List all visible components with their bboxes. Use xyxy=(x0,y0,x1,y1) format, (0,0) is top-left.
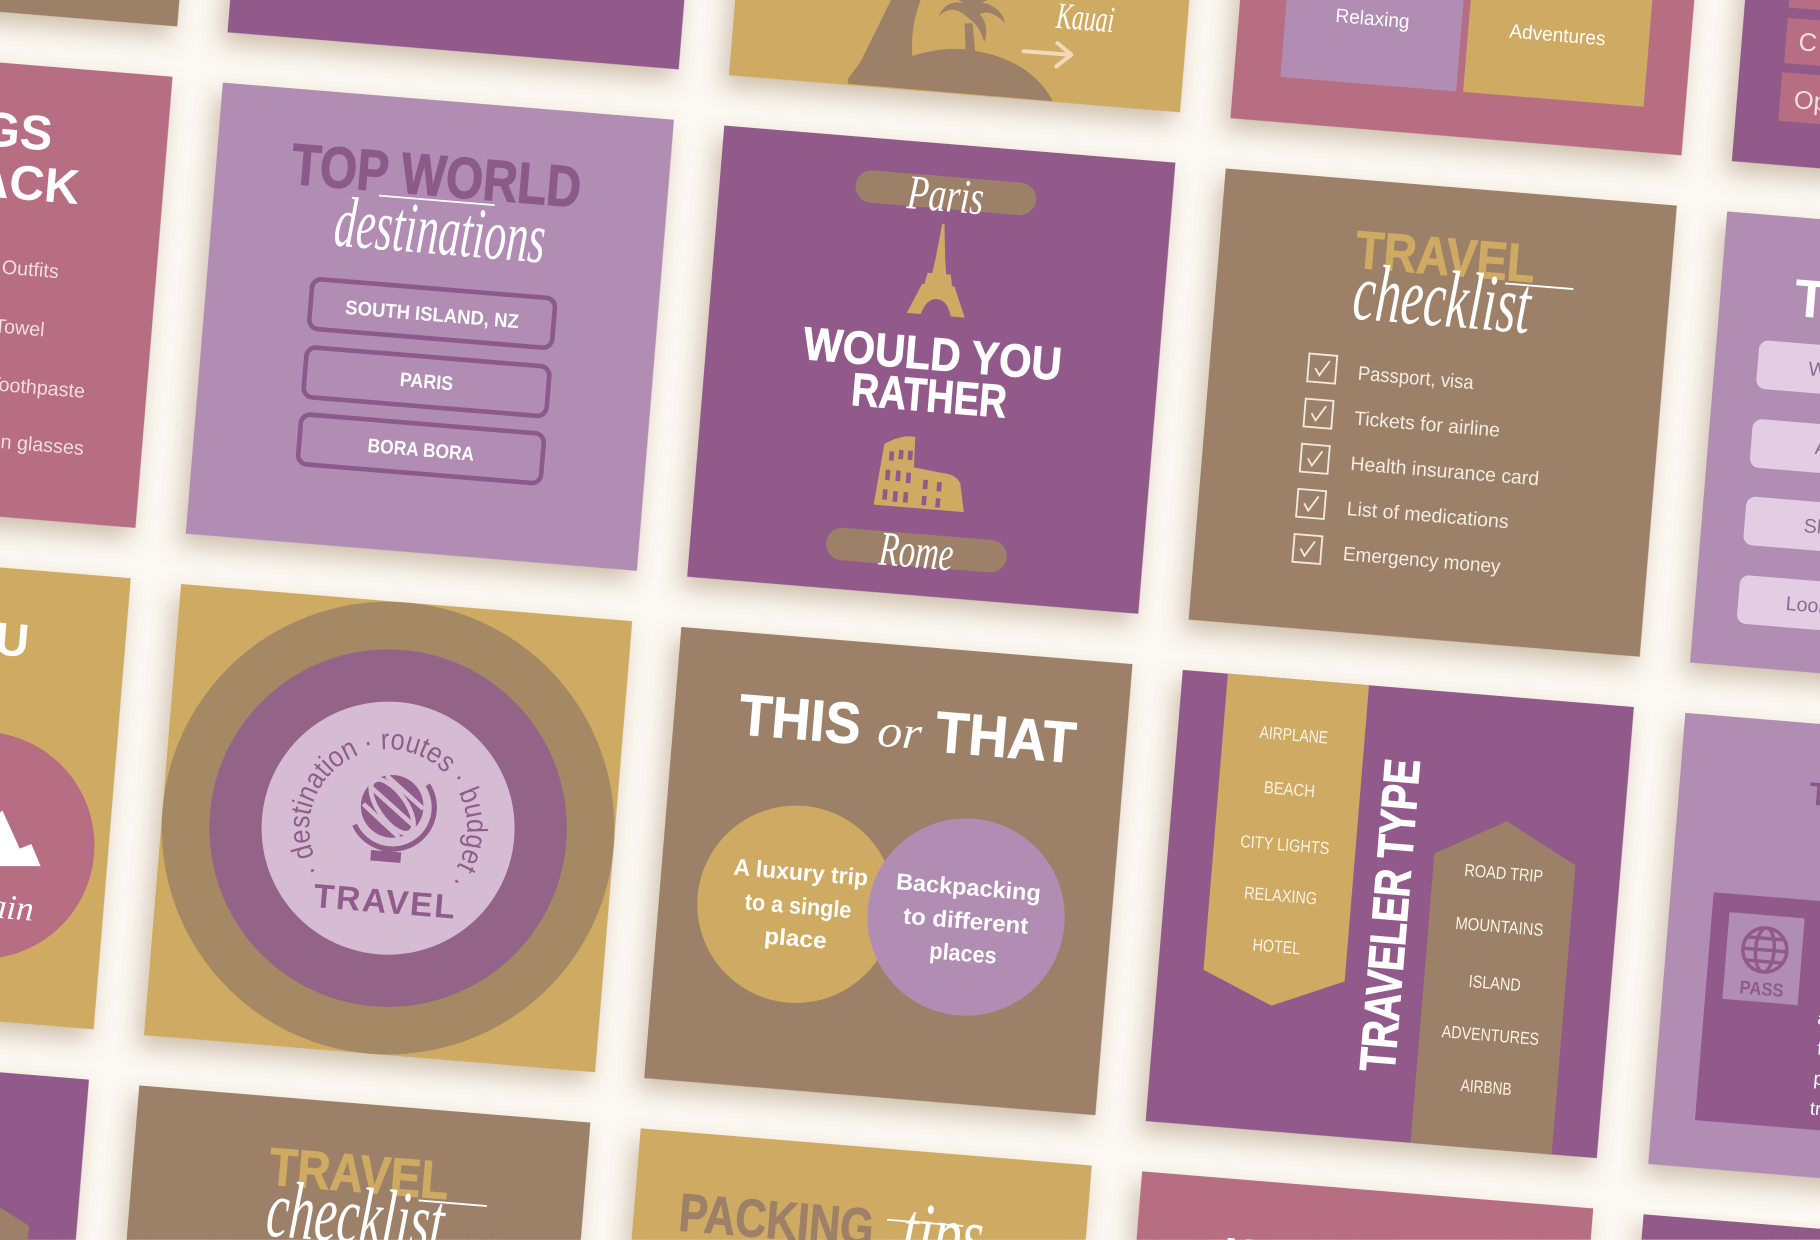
icon: island with palm tree xyxy=(848,0,1053,101)
circle: luxury trip option xyxy=(690,798,902,1011)
banner: brown options: AIRBNB xyxy=(1460,1075,1512,1099)
banner: gold options: RELAXING xyxy=(1243,883,1318,909)
checklist text: Emergency money xyxy=(1342,543,1501,578)
panel: packing tips xyxy=(630,1128,1092,1240)
circle: outer brown xyxy=(144,584,632,1072)
button: Bora Bora: BORA BORA xyxy=(367,435,475,466)
list item: C: C xyxy=(1798,28,1818,58)
heading: this or that: THAT xyxy=(933,700,1079,776)
panel: cropped passport card xyxy=(1648,713,1820,1201)
button 4 xyxy=(1736,575,1820,653)
panel: cropped mountain card xyxy=(0,541,131,1029)
list: packing items xyxy=(0,256,99,460)
panel: cropped lavender buttons card xyxy=(1690,211,1820,700)
panel: cropped purple list card xyxy=(1732,0,1820,198)
heading: travel: TRAVEL xyxy=(267,1138,451,1211)
panel: cropped purple card bottom right xyxy=(1641,1214,1820,1240)
heading: this or that xyxy=(737,682,1079,776)
inner purple panel xyxy=(1695,892,1820,1150)
option: adventures: Adventures xyxy=(1509,21,1606,50)
circle: luxury trip option: to a single xyxy=(744,888,853,923)
panel: cropped pink card bottom xyxy=(1134,1171,1593,1240)
banner: gold options: AIRPLANE xyxy=(1259,722,1329,748)
circle: luxury trip option: place xyxy=(763,923,828,954)
panel: traveler type xyxy=(1146,670,1634,1158)
panel: things to pack xyxy=(0,40,173,528)
list item xyxy=(1789,0,1820,38)
text fragments xyxy=(1809,1007,1820,1119)
heading: would you rather xyxy=(798,317,1064,432)
button: Bora Bora xyxy=(297,414,544,484)
checklist text: Tickets for airline xyxy=(1353,408,1501,442)
heading: would you rather: WOULD YOU xyxy=(801,317,1064,390)
list item: Op xyxy=(1778,72,1820,151)
circle: backpacking option: places xyxy=(929,937,998,969)
script heading: tips xyxy=(883,1184,987,1240)
panel: cropped Kauai island card xyxy=(729,0,1217,112)
circle: mountain xyxy=(0,723,103,968)
heading: travel: TRAVEL xyxy=(312,878,456,927)
banner: gold options: BEACH xyxy=(1263,777,1316,801)
icon: globe xyxy=(352,771,437,865)
panel: would you rather xyxy=(687,126,1175,614)
banner: brown options xyxy=(1411,815,1579,1154)
circle: backpacking option: Backpacking xyxy=(895,868,1042,906)
panel: second travel checklist xyxy=(126,1085,590,1240)
icon: mountain xyxy=(0,810,41,866)
checklist text: Health insurance card xyxy=(1350,453,1540,490)
panel: top world destinations xyxy=(186,83,674,571)
panel: cropped traveler preference card pink xyxy=(1230,0,1719,155)
checklist text xyxy=(1342,363,1547,581)
checkbox list xyxy=(1292,354,1337,564)
panel: this or that xyxy=(644,627,1132,1115)
option: relaxing: Relaxing xyxy=(1335,5,1410,33)
banner: gold options: HOTEL xyxy=(1252,935,1301,958)
option: adventures xyxy=(1463,0,1659,107)
icon: pass stamp xyxy=(1722,912,1805,1005)
banner: brown options: MOUNTAINS xyxy=(1455,913,1544,940)
panel: travel logo circles xyxy=(124,582,638,1096)
panel: cropped purple card top xyxy=(228,0,716,69)
script heading: destinations xyxy=(332,182,549,279)
circle: backpacking option xyxy=(860,811,1073,1024)
panel: cropped brown card top left xyxy=(0,0,214,26)
list: packing items: Outfits xyxy=(1,257,60,283)
circle: luxury trip option: A luxury trip xyxy=(733,854,869,891)
heading: travel: TRAVEL xyxy=(1353,221,1538,294)
script heading: checklist: checklist xyxy=(1350,247,1536,351)
icon fragment: brown shape xyxy=(0,1207,29,1240)
script heading: destinations: destinations xyxy=(332,182,549,279)
icon: Eiffel Tower xyxy=(907,222,972,318)
button 3 xyxy=(1743,496,1820,575)
button: South Island NZ xyxy=(309,279,556,348)
pill: Paris: Paris xyxy=(905,165,986,225)
button 1 xyxy=(1756,340,1820,419)
circle: inner light xyxy=(252,692,525,965)
heading: this or that: or xyxy=(876,706,925,760)
button: Paris xyxy=(303,347,550,417)
pill: Rome: Rome xyxy=(876,522,956,581)
heading: top world: TOP WORLD xyxy=(289,132,584,220)
banner: gold options xyxy=(1201,674,1369,1011)
circle: middle purple xyxy=(195,635,581,1021)
icon: pass stamp: PASS xyxy=(1739,976,1784,1001)
pill: Paris xyxy=(853,161,1038,230)
banner: brown options: ADVENTURES xyxy=(1441,1021,1540,1049)
option: relaxing xyxy=(1280,0,1472,91)
button 2 xyxy=(1749,419,1820,497)
heading: this or that: THIS xyxy=(737,682,863,757)
button: South Island NZ: SOUTH ISLAND, NZ xyxy=(344,297,520,333)
heading: traveler type: TRAVELER TYPE xyxy=(1349,757,1431,1074)
banner: gold options: CITY LIGHTS xyxy=(1239,831,1330,858)
checklist text: Passport, visa xyxy=(1357,363,1475,394)
checklist text: List of medications xyxy=(1346,498,1510,533)
panel: cropped purple card bottom left xyxy=(0,1042,89,1240)
circular text: · destination · routes · budget · xyxy=(290,734,488,884)
heading: would you rather: RATHER xyxy=(850,363,1009,428)
panel: travel checklist xyxy=(1189,168,1677,657)
button: Paris: PARIS xyxy=(399,369,454,395)
arrow: pointing right xyxy=(1024,43,1071,66)
pill: Rome xyxy=(824,517,1009,586)
icon: Colosseum xyxy=(874,434,970,512)
heading: things to pack xyxy=(0,93,86,215)
list item: C xyxy=(1784,18,1820,93)
banner: brown options: ISLAND xyxy=(1468,971,1522,995)
circle: backpacking option: to different xyxy=(902,903,1030,939)
banner: brown options: ROAD TRIP xyxy=(1464,860,1544,886)
